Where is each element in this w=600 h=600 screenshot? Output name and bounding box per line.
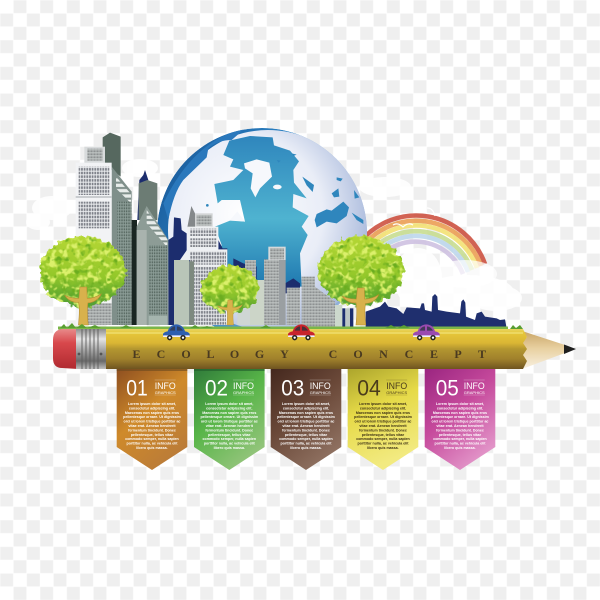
banner 04: libero quis massa. bbox=[367, 446, 399, 450]
tree right bbox=[318, 236, 404, 325]
rainbow bbox=[360, 216, 485, 274]
banner 04: pellentesque, tellus vitae bbox=[362, 433, 404, 437]
banner 01 bbox=[117, 369, 187, 470]
banner 03: pellentesque, tellus vitae bbox=[285, 433, 327, 437]
building: penthouse bbox=[84, 147, 105, 163]
birds bbox=[393, 208, 435, 227]
banner 02: fermentum tincidunt. Donec bbox=[205, 428, 253, 432]
banner 01: GRAPHICS bbox=[155, 390, 176, 395]
banner 05: INFO bbox=[464, 381, 485, 392]
globe blue shoulder bbox=[163, 128, 245, 220]
banner 02: 02 bbox=[205, 375, 228, 400]
banner 03: vitae erat. Aenean hendrerit bbox=[282, 424, 330, 428]
car: purple bbox=[413, 324, 440, 340]
banner 05: 05 bbox=[436, 375, 459, 400]
banner 04: vitae erat. Aenean hendrerit bbox=[359, 424, 407, 428]
banner 05: porttitor nulla, ac vehicula elit bbox=[435, 442, 486, 446]
banner 02: GRAPHICS bbox=[233, 390, 254, 395]
pencil highlight bbox=[106, 332, 523, 334]
banner 05: pellentesque ornare. Ut dignissim bbox=[431, 415, 489, 419]
banner 04 bbox=[348, 369, 418, 470]
banner 04: commodo semper, nulla sapien bbox=[356, 437, 410, 441]
pencil bbox=[53, 329, 576, 369]
banner 04: fermentum tincidunt. Donec bbox=[359, 428, 407, 432]
banner 02: porttitor nulla, ac vehicula elit bbox=[204, 442, 256, 446]
greenland bbox=[240, 159, 282, 222]
banner 02: vitae erat. Aenean hendrerit bbox=[206, 424, 254, 428]
navy skyline behind buildings bbox=[137, 170, 300, 325]
banner 01: 01 bbox=[126, 375, 148, 400]
banner 05: Lorem ipsum dolor sit amet, bbox=[436, 402, 484, 406]
banner 05: pellentesque, tellus vitae bbox=[439, 433, 481, 437]
banner 01: pellentesque ornare. Ut dignissim bbox=[123, 415, 181, 419]
buildings: right of centre bbox=[245, 260, 256, 281]
banner 01: orci ut lorem tristique porttitor ac bbox=[124, 420, 180, 424]
pencil body bbox=[106, 329, 527, 369]
banner 01: porttitor nulla, ac vehicula elit bbox=[127, 442, 178, 446]
land masses bbox=[206, 136, 363, 287]
banner 03: porttitor nulla, ac vehicula elit bbox=[281, 442, 332, 446]
banner 05: orci ut lorem tristique porttitor ac bbox=[432, 420, 488, 424]
grass bbox=[58, 323, 523, 330]
banner 01: commodo semper, nulla sapien bbox=[125, 437, 179, 441]
banner 05: fermentum tincidunt. Donec bbox=[436, 428, 484, 432]
banner 03 bbox=[271, 369, 341, 470]
white clouds bbox=[26, 159, 522, 316]
banner 01: consectetur adipiscing elit. bbox=[129, 406, 175, 410]
banner 03: INFO bbox=[310, 381, 331, 392]
banner 03: Maecenas non sapien quis eros bbox=[279, 411, 333, 415]
banner 04: Lorem ipsum dolor sit amet, bbox=[359, 402, 407, 406]
banner 04: consectetur adipiscing elit. bbox=[360, 406, 406, 410]
banner 05: commodo semper, nulla sapien bbox=[433, 437, 487, 441]
distant skyline bbox=[366, 294, 507, 328]
building: dark tower bbox=[103, 133, 121, 177]
globe bbox=[157, 128, 368, 338]
banner 05: GRAPHICS bbox=[464, 390, 485, 395]
pencil lead bbox=[564, 344, 576, 354]
building: side facade bbox=[112, 167, 132, 325]
banner 05: vitae erat. Aenean hendrerit bbox=[436, 424, 484, 428]
banner 02: libero quis massa. bbox=[214, 446, 245, 450]
banner 02: Maecenas non sapien quis eros bbox=[202, 411, 256, 415]
banner 01: INFO bbox=[155, 381, 176, 392]
banner 01: fermentum tincidunt. Donec bbox=[128, 428, 176, 432]
banner 04: orci ut lorem tristique porttitor ac bbox=[355, 420, 411, 424]
building: second tower bbox=[139, 180, 157, 220]
banner 01: Maecenas non sapien quis eros bbox=[125, 411, 179, 415]
banner 04: 04 bbox=[357, 375, 381, 400]
banner 03: pellentesque ornare. Ut dignissim bbox=[277, 415, 335, 419]
banner 05: consectetur adipiscing elit. bbox=[437, 406, 483, 410]
banner 01: Lorem ipsum dolor sit amet, bbox=[128, 402, 176, 406]
banner 03: 03 bbox=[281, 375, 304, 400]
banner 01: vitae erat. Aenean hendrerit bbox=[128, 424, 176, 428]
car: blue bbox=[163, 324, 190, 340]
banner 02: pellentesque ornare. Ut dignissim bbox=[200, 415, 258, 419]
banner 03: libero quis massa. bbox=[290, 446, 322, 450]
banner 02: commodo semper, nulla sapien bbox=[203, 437, 256, 441]
banner 03: fermentum tincidunt. Donec bbox=[282, 428, 330, 432]
banner 02: consectetur adipiscing elit. bbox=[206, 406, 252, 410]
car: red bbox=[288, 324, 315, 340]
buildings right and distant skyline bbox=[302, 277, 507, 328]
pencil tip wood bbox=[522, 331, 565, 369]
building: black gap bbox=[132, 220, 137, 325]
building: green block bbox=[174, 260, 189, 325]
banner 03: GRAPHICS bbox=[310, 390, 331, 395]
ferrule bbox=[76, 329, 106, 369]
tree left bbox=[40, 236, 126, 325]
banner 02: orci ut lorem tristique porttitor ac bbox=[201, 420, 258, 424]
banner 03: orci ut lorem tristique porttitor ac bbox=[278, 420, 334, 424]
banner 01: libero quis massa. bbox=[136, 446, 168, 450]
banner 01: pellentesque, tellus vitae bbox=[131, 433, 173, 437]
banner 03: consectetur adipiscing elit. bbox=[283, 406, 329, 410]
banner 02: Lorem ipsum dolor sit amet, bbox=[205, 402, 253, 406]
building: white tower bbox=[76, 163, 112, 325]
banner 03: commodo semper, nulla sapien bbox=[279, 437, 333, 441]
banner 04: GRAPHICS bbox=[386, 390, 408, 395]
banner 02: INFO bbox=[233, 381, 254, 392]
buildings left bbox=[76, 133, 300, 325]
banner 02 bbox=[194, 369, 265, 470]
banner 04: INFO bbox=[386, 381, 407, 392]
banner 05 bbox=[425, 369, 495, 470]
banner 04: pellentesque ornare. Ut dignissim bbox=[354, 415, 412, 419]
banner 03: Lorem ipsum dolor sit amet, bbox=[282, 402, 330, 406]
tree middle bbox=[201, 265, 259, 325]
pencil title: ECOLOGYCONCEPT bbox=[132, 347, 486, 361]
eraser bbox=[53, 329, 78, 369]
rainbow fade cloud bbox=[433, 260, 497, 288]
banner 04: porttitor nulla, ac vehicula elit bbox=[358, 442, 409, 446]
banner 02: pellentesque, tellus vitae bbox=[208, 433, 251, 437]
banner 05: Maecenas non sapien quis eros bbox=[433, 411, 487, 415]
banner 04: Maecenas non sapien quis eros bbox=[356, 411, 410, 415]
banner 05: libero quis massa. bbox=[444, 446, 476, 450]
building: stepped tower bbox=[187, 206, 195, 227]
